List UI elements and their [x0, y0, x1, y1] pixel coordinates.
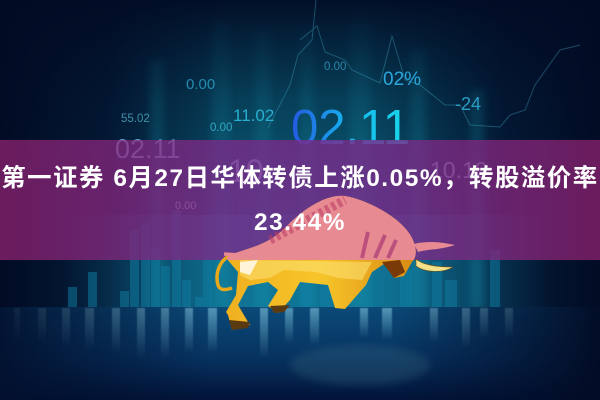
bull shading: [240, 260, 372, 280]
reflective floor: [0, 307, 600, 400]
hoof: [229, 320, 250, 330]
horn: [416, 259, 453, 271]
numbers: 11.02: [233, 106, 274, 125]
line chart: [268, 0, 580, 128]
title line 2: 23.44%: [254, 209, 346, 236]
numbers: -24: [455, 94, 481, 114]
bull illustration: [217, 196, 455, 330]
lower teal glow: [0, 215, 600, 307]
numbers: 0.00: [186, 76, 215, 93]
pink upper body: [224, 196, 416, 260]
numbers: 0.00: [324, 61, 346, 73]
ear: [414, 242, 455, 252]
numbers: 10: [228, 153, 264, 189]
numbers: 02.11: [115, 134, 181, 164]
numbers: 0.00: [210, 122, 232, 134]
title line 1: 第一证券 6月27日华体转债上涨0.05%，转股溢价率: [1, 165, 599, 192]
head shadow: [382, 260, 405, 278]
numbers: 55.02: [121, 113, 150, 125]
numbers: [115, 61, 488, 212]
numbers: 10.10: [430, 157, 488, 183]
numbers: 02.11: [291, 101, 410, 155]
tail: [217, 255, 240, 290]
bull body: [226, 196, 416, 330]
title band: [0, 140, 600, 260]
bar chart: [68, 210, 500, 307]
vertical light streaks: [150, 20, 484, 310]
numbers: 02%: [383, 69, 421, 90]
numbers: 0.00: [175, 200, 196, 212]
